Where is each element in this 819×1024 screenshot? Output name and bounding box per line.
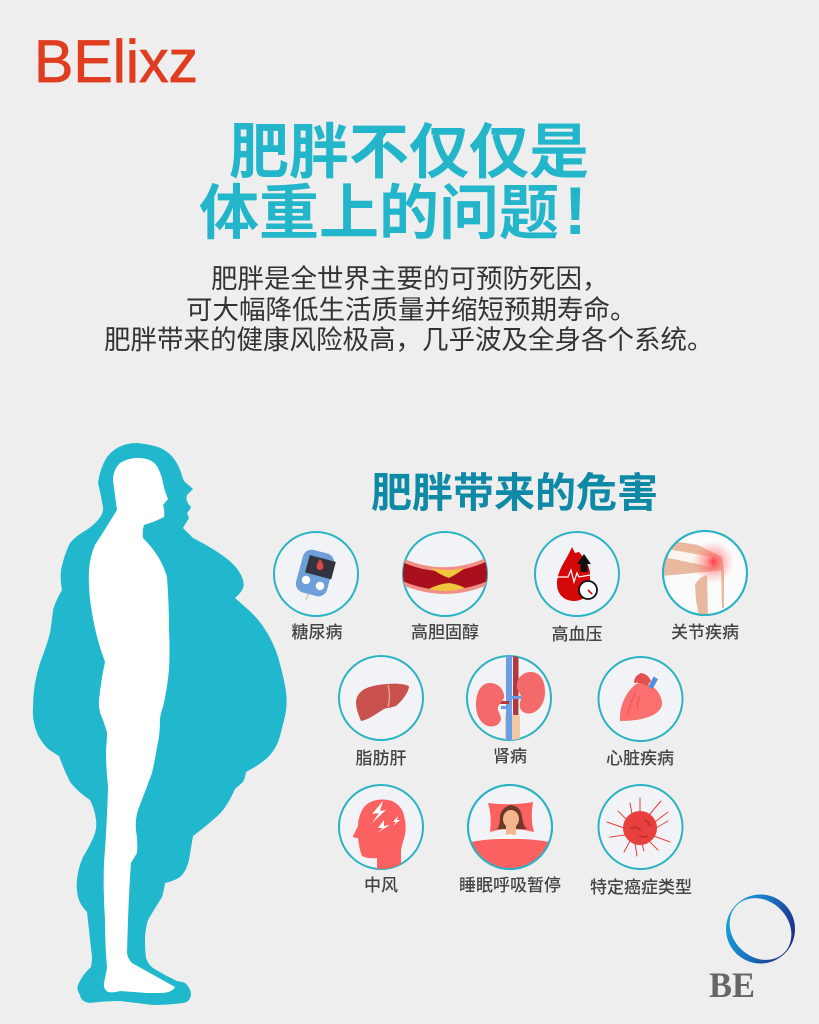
item: certain cancers bbox=[590, 785, 692, 897]
intro text bbox=[104, 264, 714, 355]
item: high cholesterol bbox=[400, 532, 490, 642]
item: kidney disease bbox=[467, 655, 551, 766]
title: 体重上的问题 bbox=[199, 180, 559, 247]
icon: kidneys bbox=[476, 655, 545, 745]
item: stroke bbox=[339, 785, 423, 895]
item: high blood pressure: 高血压 bbox=[552, 625, 602, 644]
item: joint disease: 关节疾病 bbox=[671, 623, 739, 642]
heading: hazards: 肥胖带来的危害 bbox=[371, 470, 658, 516]
body silhouette: obese outline and slim figure bbox=[33, 443, 287, 1005]
obese silhouette bbox=[33, 443, 287, 1005]
intro text: 肥胖是全世界主要的可预防死因， bbox=[211, 264, 608, 294]
slim silhouette bbox=[89, 458, 175, 993]
intro text: 可大幅降低生活质量并缩短预期寿命。 bbox=[186, 295, 636, 325]
logo wordmark: BE bbox=[709, 965, 755, 1005]
item: fatty liver: 脂肪肝 bbox=[356, 749, 406, 768]
item: fatty liver bbox=[339, 656, 423, 768]
icon: liver bbox=[356, 684, 409, 721]
icon: inflamed knee bbox=[664, 542, 732, 614]
item: sleep apnea bbox=[459, 785, 561, 895]
item: kidney disease: 肾病 bbox=[493, 747, 527, 766]
icon: sleeping person bbox=[472, 802, 548, 868]
icon: cancer cell bbox=[607, 798, 670, 856]
title: ! bbox=[564, 173, 587, 249]
logo ring bbox=[726, 894, 795, 964]
icon: glucose meter bbox=[294, 548, 336, 600]
item: heart disease bbox=[598, 657, 682, 768]
item: diabetes bbox=[274, 532, 358, 642]
item: high cholesterol: 高胆固醇 bbox=[411, 623, 479, 642]
item: heart disease: 心脏疾病 bbox=[606, 749, 674, 768]
BE logo bbox=[709, 894, 795, 1005]
title bbox=[199, 119, 589, 249]
item: sleep apnea: 睡眠呼吸暂停 bbox=[459, 876, 561, 895]
intro text: 肥胖带来的健康风险极高，几乎波及全身各个系统。 bbox=[104, 325, 714, 355]
title: 肥胖不仅仅是 bbox=[229, 119, 589, 186]
icon: clogged artery bbox=[403, 558, 487, 594]
brand logo: BElixz: BElixz bbox=[34, 28, 198, 95]
icon: blood drop with gauge bbox=[557, 547, 597, 601]
item: diabetes: 糖尿病 bbox=[292, 623, 342, 642]
icon: head with lightning bbox=[353, 800, 406, 872]
item: stroke: 中风 bbox=[364, 876, 398, 895]
item: certain cancers: 特定癌症类型 bbox=[590, 877, 692, 897]
item: high blood pressure bbox=[535, 532, 619, 644]
item: joint disease bbox=[660, 531, 747, 642]
icon: heart bbox=[620, 673, 662, 721]
